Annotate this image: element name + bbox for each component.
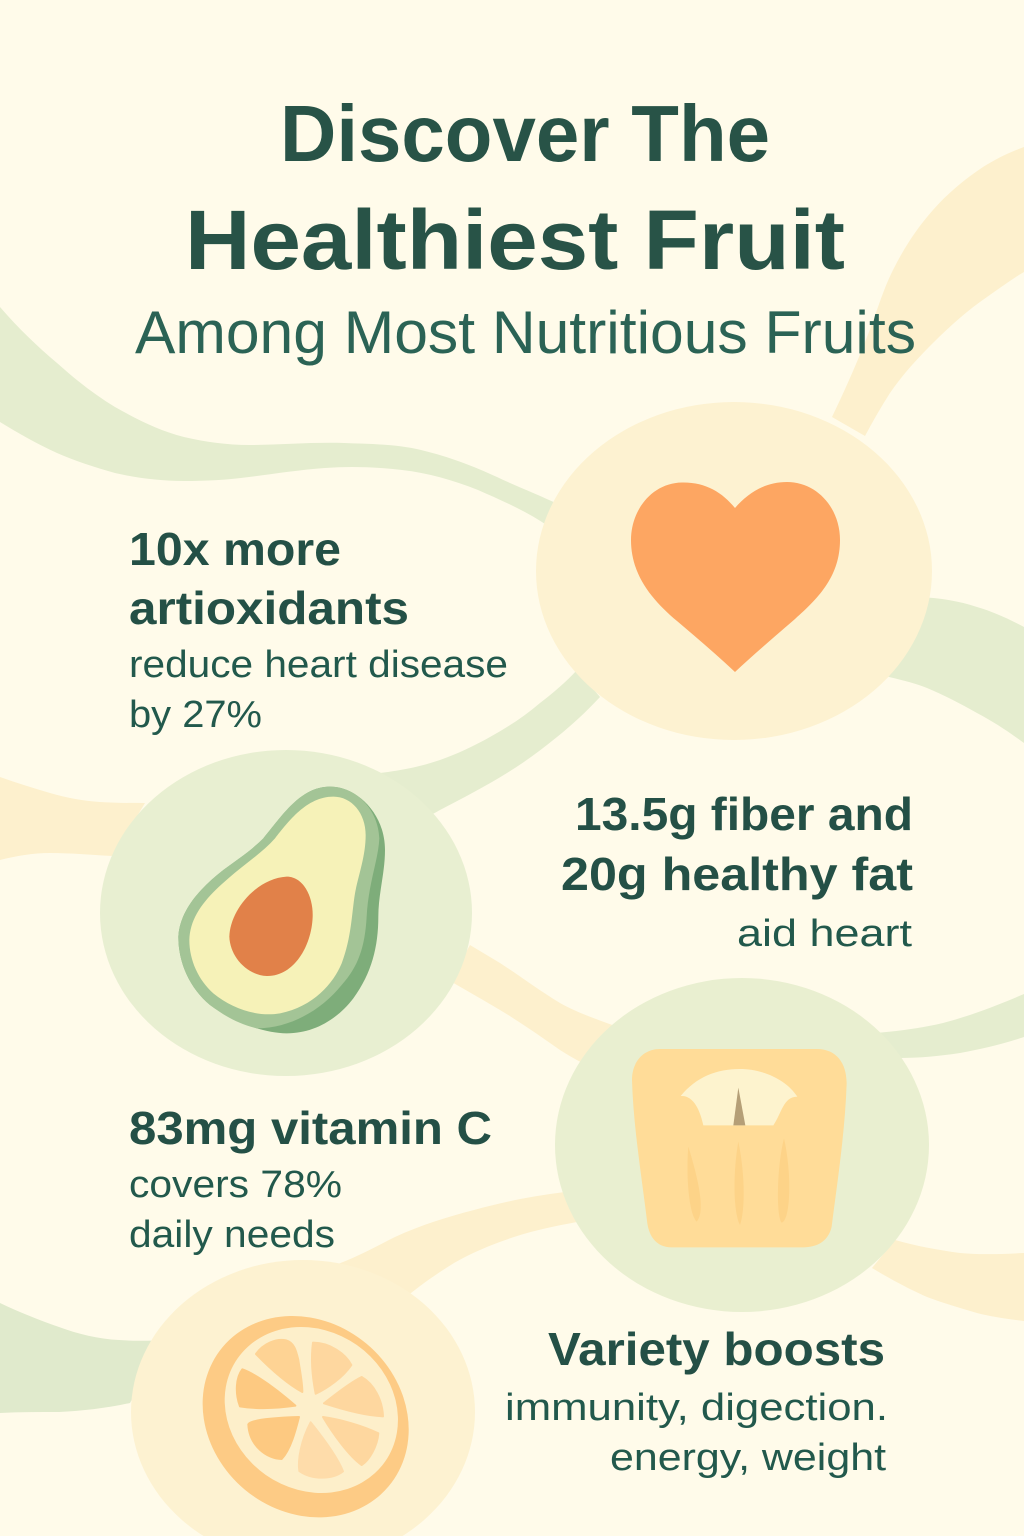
text block: variety boosts: immunity, digection. xyxy=(505,1387,888,1429)
text block: variety boosts: energy, weight xyxy=(610,1437,886,1479)
text block: antioxidants: 10x more xyxy=(129,523,341,575)
panel: citrus icon circle xyxy=(131,1260,475,1536)
panel: avocado icon circle xyxy=(100,750,472,1076)
text block: antioxidants: reduce heart disease xyxy=(129,644,508,686)
panel: scale icon circle xyxy=(555,978,929,1312)
text block: antioxidants xyxy=(129,523,508,736)
text block: fiber and fat xyxy=(561,788,913,955)
text block: variety boosts: Variety boosts xyxy=(548,1323,885,1375)
title xyxy=(135,89,916,366)
icon: citrus slice xyxy=(162,1274,450,1536)
text block: fiber and fat: 20g healthy fat xyxy=(561,848,913,900)
text block: antioxidants: artioxidants xyxy=(129,582,409,634)
icon: heart xyxy=(631,482,840,672)
title: Among Most Nutritious Fruits xyxy=(135,299,916,366)
icon: weight scale xyxy=(632,1049,847,1247)
panel: heart icon circle xyxy=(536,402,932,740)
text block: vitamin C xyxy=(129,1102,492,1256)
icon: avocado xyxy=(178,787,385,1033)
text block: antioxidants: by 27% xyxy=(129,694,262,736)
text block: variety boosts xyxy=(505,1323,888,1479)
text block: fiber and fat: 13.5g fiber and xyxy=(575,788,913,840)
title: Discover The xyxy=(280,89,770,178)
text block: fiber and fat: aid heart xyxy=(737,913,913,955)
text block: vitamin C: 83mg vitamin C xyxy=(129,1102,492,1154)
text block: vitamin C: covers 78% xyxy=(129,1164,342,1206)
text block: vitamin C: daily needs xyxy=(129,1214,335,1256)
title: Healthiest Fruit xyxy=(185,193,845,287)
